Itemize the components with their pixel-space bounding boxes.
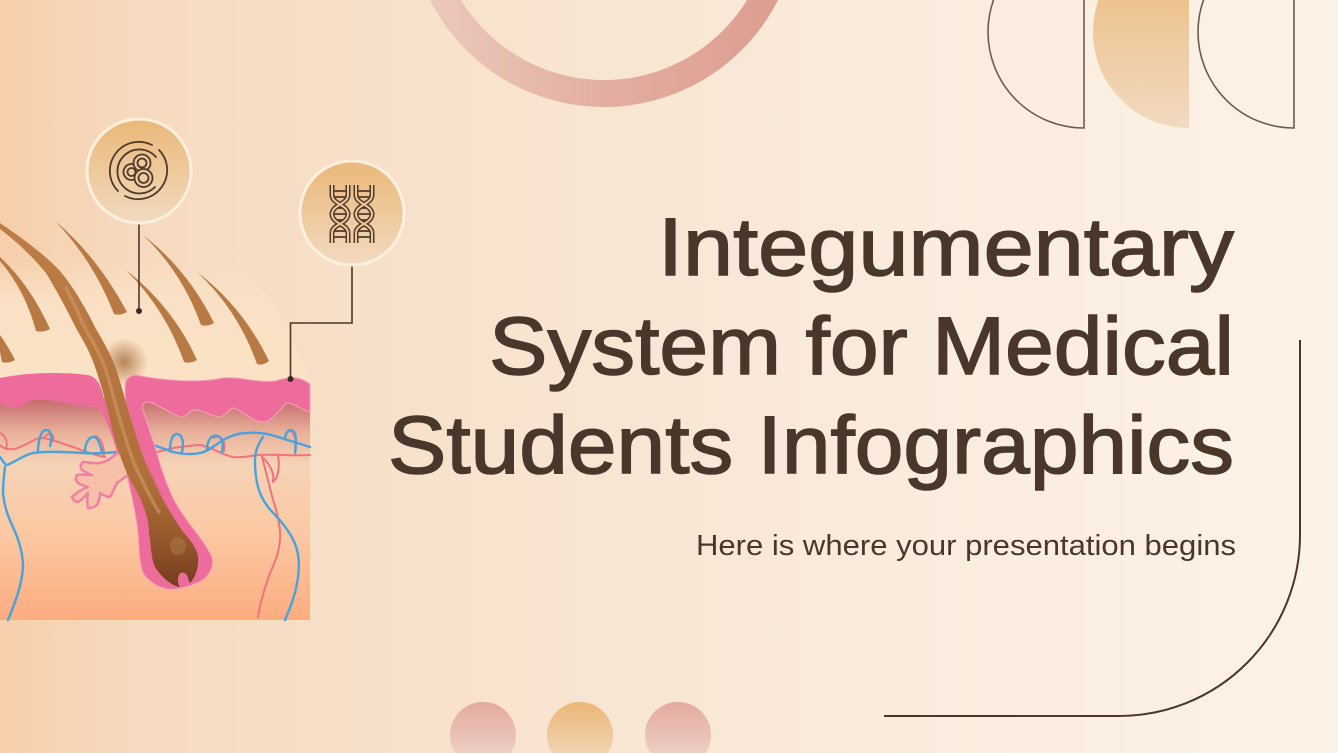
gold half circle [1093, 0, 1189, 128]
title: Students Infographics [388, 400, 1234, 491]
epidermis surface [0, 262, 310, 400]
corner curve line [884, 340, 1300, 716]
hair bulb highlight [170, 537, 186, 555]
title [388, 202, 1234, 491]
outlined half circle, right [1198, 0, 1294, 128]
skin cross-section illustration [0, 221, 310, 620]
bottom dots [450, 702, 711, 753]
subtitle: Here is where your presentation begins [696, 530, 1236, 562]
small hairs [0, 221, 269, 365]
large hair [0, 223, 198, 587]
icon: DNA [300, 161, 404, 265]
connector line from cell icon [136, 224, 142, 314]
epidermis pink layer and follicle, right [125, 375, 310, 589]
connector line from DNA icon [288, 266, 352, 382]
dermis [0, 398, 310, 620]
epidermis pink layer, left [0, 373, 128, 480]
title: Integumentary [658, 202, 1234, 293]
hair highlight [66, 288, 159, 512]
blood vessels [0, 430, 310, 620]
hair shadow [100, 338, 148, 386]
decorative ring at top [422, 0, 786, 94]
outlined half circle, left [988, 0, 1084, 128]
sebaceous gland [72, 453, 128, 508]
icon: cells [87, 119, 191, 223]
title: System for Medical [489, 301, 1234, 392]
